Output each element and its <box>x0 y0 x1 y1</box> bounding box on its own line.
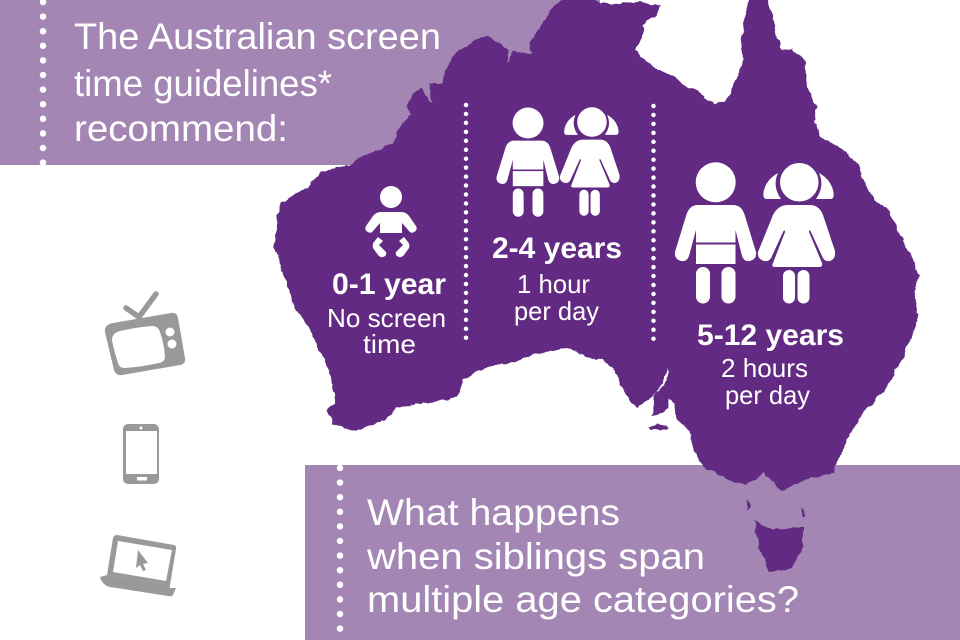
icon: boy 2-4 years <box>496 108 559 217</box>
panel: bottom question banner <box>305 465 960 640</box>
heading: guidelines: recommend: <box>74 107 288 149</box>
icon: girl 5-12 years <box>758 162 835 304</box>
label: 0-1 year: time <box>363 329 416 359</box>
label: 2-4 years: 1 hour <box>517 269 590 299</box>
heading: siblings question: when siblings span <box>366 535 705 577</box>
label: 2-4 years: 2-4 years <box>492 232 622 265</box>
label: 0-1 year <box>327 268 446 359</box>
dotted divider: top banner <box>40 2 46 165</box>
heading: guidelines <box>74 15 441 149</box>
icon: boy 5-12 years <box>675 162 756 304</box>
dotted divider: between 2-4 and 5-12 <box>651 106 656 347</box>
heading: siblings question: What happens <box>367 491 620 533</box>
label: 0-1 year: No screen <box>327 303 446 333</box>
label: 2-4 years <box>492 232 622 326</box>
panel: top guidelines banner <box>0 0 600 165</box>
heading: siblings question: multiple age categories? <box>367 578 799 620</box>
label: 5-12 years: 2 hours <box>721 353 808 383</box>
icon: laptop <box>100 535 176 596</box>
icon: baby <box>365 186 417 257</box>
heading: guidelines: time guidelines* <box>74 62 332 104</box>
label: 0-1 year: 0-1 year <box>332 268 446 301</box>
label: 5-12 years: 5-12 years <box>697 319 844 352</box>
icon: smartphone <box>123 424 159 484</box>
label: 5-12 years: per day <box>725 380 810 410</box>
heading: guidelines: The Australian screen <box>74 15 441 57</box>
label: 2-4 years: per day <box>514 296 599 326</box>
dotted divider: bottom banner <box>337 468 343 640</box>
heading: siblings question <box>366 491 799 620</box>
dotted divider: between 0-1 and 2-4 <box>464 105 468 338</box>
icon: television <box>105 294 185 375</box>
label: 5-12 years <box>697 319 844 410</box>
map of Australia <box>274 0 918 572</box>
icon: girl 2-4 years <box>560 107 620 216</box>
